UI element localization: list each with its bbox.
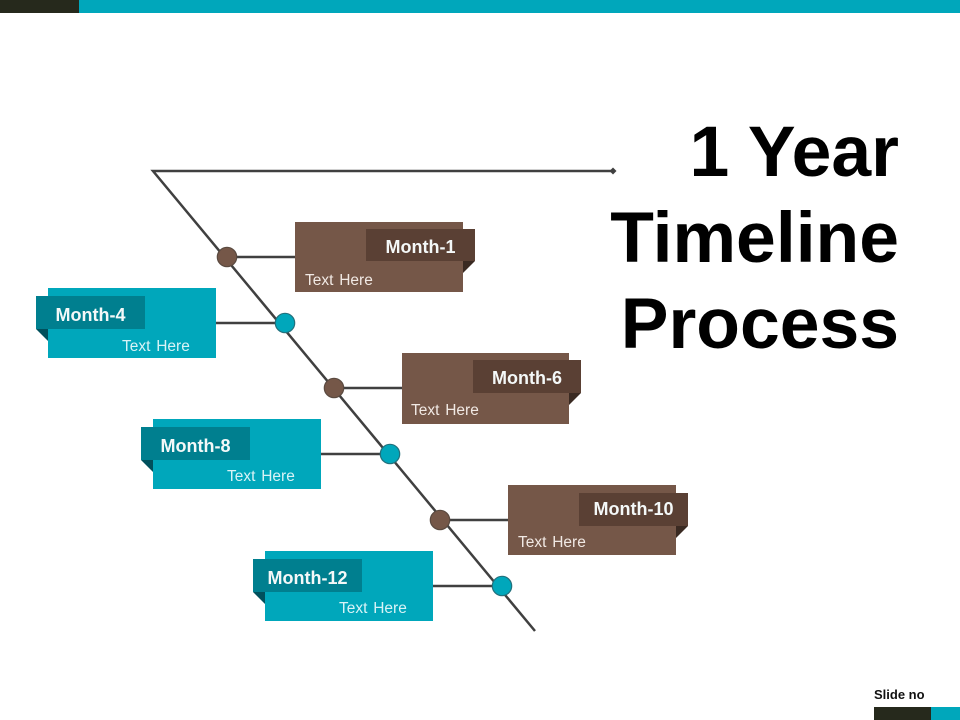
slide number label: Slide no xyxy=(874,687,925,702)
tag xyxy=(473,360,581,393)
node: month 12 xyxy=(492,576,512,596)
node: month 8 xyxy=(380,444,400,464)
footer dark segment xyxy=(874,707,931,720)
fold xyxy=(253,592,265,604)
card: month 1 xyxy=(295,222,463,292)
fold xyxy=(36,329,48,341)
card: month 12 xyxy=(265,551,433,621)
fold xyxy=(141,460,153,472)
text: Text Here xyxy=(227,468,295,485)
tag xyxy=(253,559,362,592)
tag xyxy=(579,493,688,526)
tag: Month-8 xyxy=(160,436,230,456)
tag: Month-10 xyxy=(594,499,674,519)
title: Timeline xyxy=(610,198,899,278)
title: Process xyxy=(621,284,899,364)
text: Text Here xyxy=(339,600,407,617)
card: month 4 xyxy=(48,288,216,358)
top bar dark segment xyxy=(0,0,79,13)
card: month 10 xyxy=(508,485,676,555)
node: month 4 xyxy=(275,313,295,333)
connectors xyxy=(216,257,509,586)
title: 1 Year xyxy=(690,112,899,192)
fold xyxy=(569,393,581,405)
tag: Month-4 xyxy=(56,305,125,325)
tag xyxy=(141,427,250,460)
text: Text Here xyxy=(518,534,586,551)
fold xyxy=(463,261,475,273)
top bar xyxy=(0,0,960,13)
top bar teal segment xyxy=(79,0,960,13)
fold xyxy=(676,526,688,538)
node: month 10 xyxy=(430,510,450,530)
tag: Month-1 xyxy=(386,237,455,257)
timeline axis xyxy=(153,168,616,631)
title xyxy=(610,112,899,364)
text: Text Here xyxy=(305,272,373,289)
text: Text Here xyxy=(122,338,190,355)
node: month 6 xyxy=(324,378,344,398)
node: month 1 xyxy=(217,247,237,267)
footer teal segment xyxy=(931,707,960,720)
card: month 6 xyxy=(402,353,569,424)
card: month 8 xyxy=(153,419,321,489)
tag xyxy=(36,296,145,329)
tag xyxy=(366,229,475,261)
footer bar xyxy=(874,707,960,720)
tag: Month-6 xyxy=(492,368,562,388)
text: Text Here xyxy=(411,402,479,419)
tag: Month-12 xyxy=(268,568,348,588)
